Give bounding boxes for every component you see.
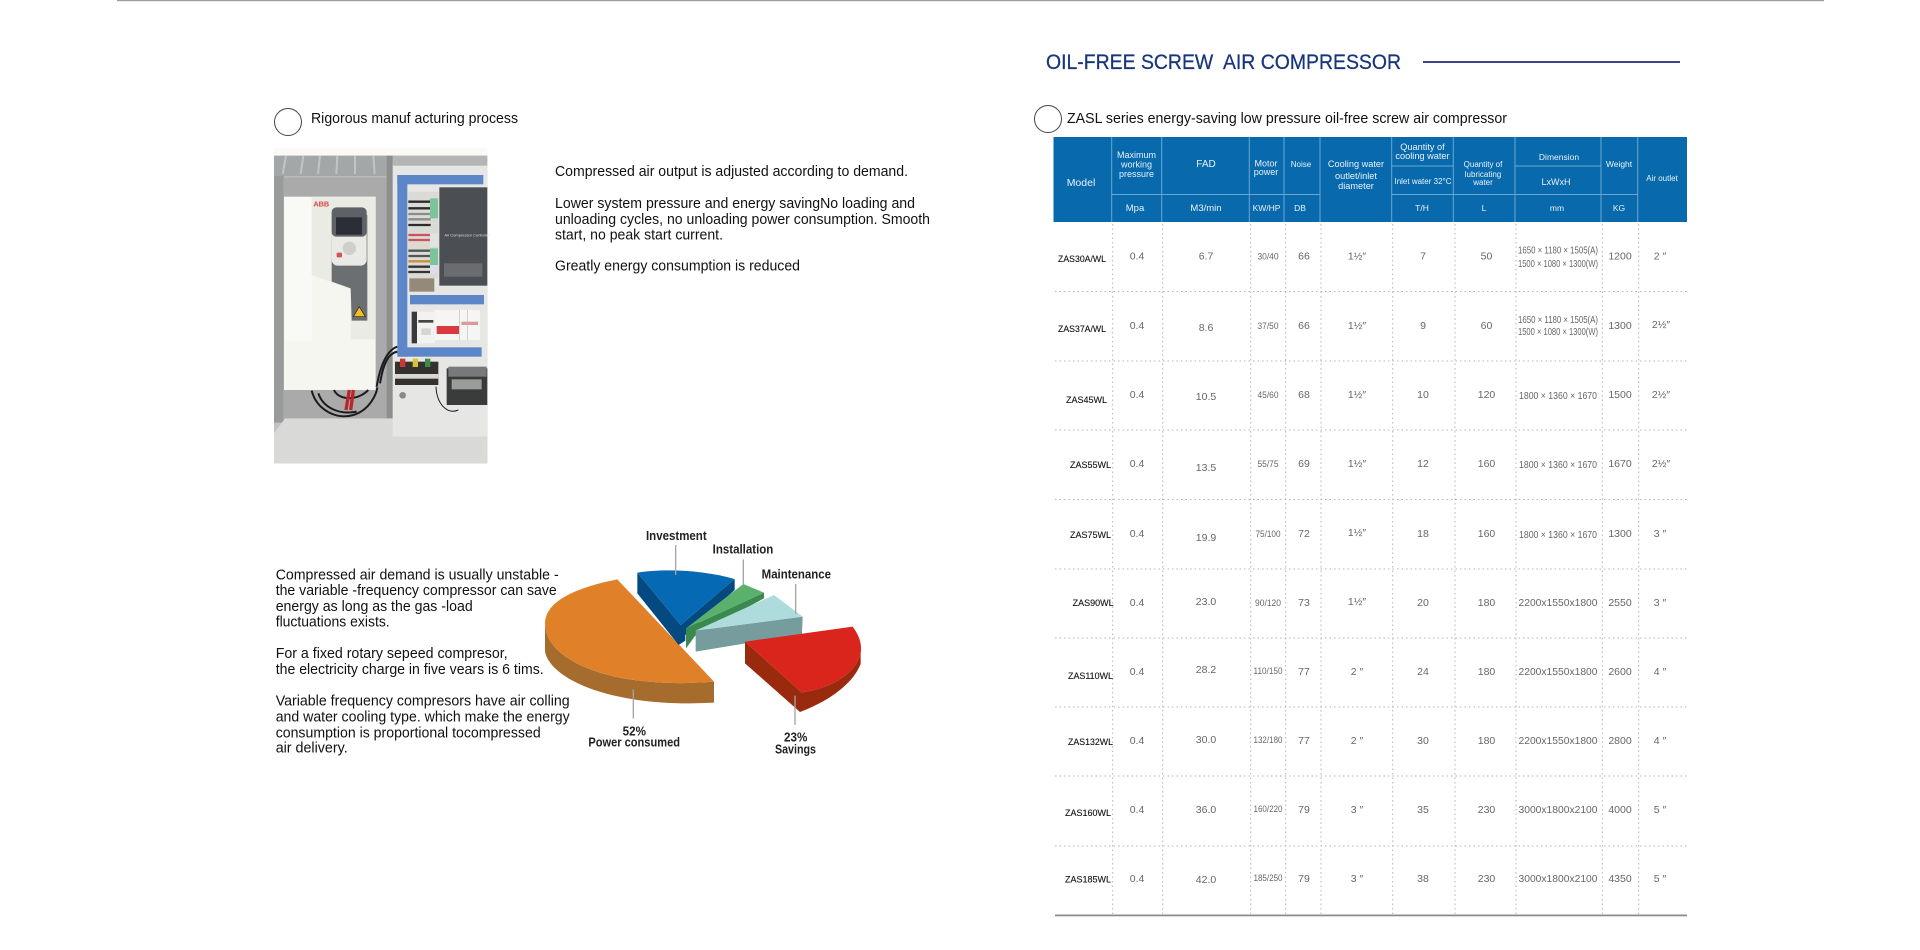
row: ZAS110WL: 2600 xyxy=(1608,666,1632,678)
table header: cooling water xyxy=(1395,151,1450,161)
slice: power consumed xyxy=(545,579,714,703)
row: ZAS160WL: 35 xyxy=(1417,804,1429,816)
text block: variable frequency explanation: For a fixed rotary sepeed compresor, xyxy=(276,645,508,662)
text block: variable frequency explanation xyxy=(276,566,570,757)
row: ZAS185WL xyxy=(1065,873,1667,886)
row: ZAS75WL: ZAS75WL xyxy=(1070,530,1111,541)
row: ZAS75WL: 75/100 xyxy=(1256,529,1280,540)
row: ZAS30A/WL: 30/40 xyxy=(1258,252,1278,262)
blue brackets xyxy=(397,175,484,357)
panel: manufacturing process xyxy=(274,108,930,463)
table header: Motor xyxy=(1254,159,1278,169)
row: ZAS55WL: 1½″ xyxy=(1348,458,1366,470)
row: ZAS30A/WL: ZAS30A/WL xyxy=(1058,254,1106,265)
text block: demand adjustment: Greatly energy consumption is reduced xyxy=(555,258,800,275)
table header: mm xyxy=(1550,203,1564,213)
row: ZAS132WL: 4 ″ xyxy=(1654,735,1667,747)
row: ZAS185WL: 38 xyxy=(1417,873,1429,885)
heading: rigorous manufacturing process: Rigorous manuf acturing process xyxy=(311,110,518,127)
row: ZAS30A/WL: 2 ″ xyxy=(1654,250,1667,262)
row: ZAS132WL: 2 ″ xyxy=(1351,735,1364,747)
row: ZAS55WL: 2½″ xyxy=(1652,458,1670,470)
text block: demand adjustment: Lower system pressure and energy savingNo loading and xyxy=(555,195,915,212)
row: ZAS55WL: 1800 × 1360 × 1670 xyxy=(1519,459,1597,471)
row: ZAS55WL: 55/75 xyxy=(1258,459,1278,470)
row: ZAS160WL: 230 xyxy=(1478,804,1495,816)
row: ZAS55WL: 0.4 xyxy=(1130,458,1144,470)
table header: Dimension xyxy=(1539,152,1579,162)
text block: demand adjustment: start, no peak start current. xyxy=(555,226,723,244)
row: ZAS45WL: 1½″ xyxy=(1348,389,1366,401)
row: ZAS90WL: 2550 xyxy=(1608,597,1632,609)
row: ZAS30A/WL: 1500 × 1080 × 1300(W) xyxy=(1518,258,1598,270)
row: ZAS45WL: 120 xyxy=(1478,389,1495,401)
row: ZAS30A/WL: 1200 xyxy=(1608,250,1632,262)
row: ZAS110WL: 24 xyxy=(1417,666,1429,678)
pie labels xyxy=(588,529,831,756)
row: ZAS37A/WL: 1500 × 1080 × 1300(W) xyxy=(1518,326,1598,338)
table header: KG xyxy=(1613,203,1625,213)
table header: pressure xyxy=(1119,169,1154,179)
row: ZAS185WL: 79 xyxy=(1298,873,1310,885)
table header: diameter xyxy=(1338,181,1374,191)
row: ZAS37A/WL: 0.4 xyxy=(1130,320,1144,332)
row: ZAS160WL: ZAS160WL xyxy=(1065,808,1111,819)
table: specifications xyxy=(1054,137,1688,916)
row: ZAS30A/WL: 1½″ xyxy=(1348,250,1366,262)
row: ZAS110WL: 4 ″ xyxy=(1654,666,1667,678)
row: ZAS90WL: 0.4 xyxy=(1130,597,1144,609)
row: ZAS132WL: 30 xyxy=(1417,735,1429,747)
row: ZAS90WL: 90/120 xyxy=(1255,598,1281,609)
table header: Maximum xyxy=(1117,150,1156,160)
slice: installation xyxy=(686,584,764,648)
row: ZAS37A/WL: 1650 × 1180 × 1505(A) xyxy=(1518,314,1598,326)
row: ZAS37A/WL: 37/50 xyxy=(1258,321,1278,332)
row: ZAS45WL: 10.5 xyxy=(1196,391,1216,403)
row: ZAS75WL: 1½″ xyxy=(1348,527,1366,539)
row: ZAS90WL: 1½″ xyxy=(1348,596,1366,608)
table header: FAD xyxy=(1196,159,1216,170)
row: ZAS37A/WL: 8.6 xyxy=(1199,322,1213,334)
table header: T/H xyxy=(1415,203,1429,213)
table header: Quantity of xyxy=(1400,142,1445,152)
row: ZAS132WL: 0.4 xyxy=(1130,735,1144,747)
row: ZAS185WL: 3 ″ xyxy=(1351,873,1364,885)
row: ZAS90WL xyxy=(1073,596,1667,609)
pie labels: 23% xyxy=(784,731,807,745)
row: ZAS132WL xyxy=(1068,734,1667,748)
row: ZAS110WL: 0.4 xyxy=(1130,666,1144,678)
table header: Mpa xyxy=(1126,203,1145,214)
text block: demand adjustment xyxy=(555,163,930,275)
row: ZAS132WL: 2200x1550x1800 xyxy=(1518,735,1598,747)
table header: KW/HP xyxy=(1253,203,1281,213)
row: ZAS132WL: 2800 xyxy=(1608,735,1632,747)
row: ZAS30A/WL: 0.4 xyxy=(1130,250,1144,262)
row: ZAS30A/WL: 6.7 xyxy=(1199,250,1213,262)
text block: variable frequency explanation: air delivery. xyxy=(276,740,348,757)
row: ZAS90WL: 73 xyxy=(1298,597,1310,609)
pie labels: Power consumed xyxy=(588,735,680,749)
row: ZAS132WL: 77 xyxy=(1298,735,1310,747)
pie labels: Maintenance xyxy=(762,567,831,581)
leader lines xyxy=(633,545,796,725)
row: ZAS55WL: 1670 xyxy=(1608,458,1632,470)
row: ZAS110WL: 2200x1550x1800 xyxy=(1518,666,1598,678)
row: ZAS160WL: 36.0 xyxy=(1196,804,1216,816)
row: ZAS37A/WL: 1½″ xyxy=(1348,320,1366,332)
row: ZAS90WL: 3 ″ xyxy=(1654,597,1667,609)
row: ZAS30A/WL: 7 xyxy=(1420,250,1426,262)
row: ZAS45WL: 68 xyxy=(1298,389,1310,401)
row: ZAS185WL: 4350 xyxy=(1608,873,1632,885)
row: ZAS110WL: 2 ″ xyxy=(1351,666,1364,678)
row: ZAS75WL: 19.9 xyxy=(1196,532,1216,544)
row: ZAS185WL: 185/250 xyxy=(1254,873,1282,884)
table header: outlet/inlet xyxy=(1335,171,1377,181)
row: ZAS45WL: 1500 xyxy=(1608,389,1632,401)
row: ZAS45WL: 1800 × 1360 × 1670 xyxy=(1519,390,1597,402)
photo: control cabinet xyxy=(274,148,491,463)
row: ZAS160WL: 5 ″ xyxy=(1654,804,1667,816)
row: ZAS30A/WL: 1650 × 1180 × 1505(A) xyxy=(1518,244,1598,256)
row: ZAS185WL: 3000x1800x2100 xyxy=(1518,873,1598,885)
pie labels: Investment xyxy=(646,529,707,543)
row: ZAS45WL: 2½″ xyxy=(1652,389,1670,401)
row: ZAS185WL: 5 ″ xyxy=(1654,873,1667,885)
row: ZAS75WL: 3 ″ xyxy=(1654,528,1667,540)
cables xyxy=(312,347,458,416)
text block: demand adjustment: unloading cycles, no unloading power consumption. Smooth xyxy=(555,211,930,228)
row: ZAS45WL xyxy=(1066,389,1670,406)
pie labels: Installation xyxy=(713,543,773,557)
text block: variable frequency explanation: consumption is proportional tocompressed xyxy=(276,724,541,741)
row: ZAS110WL: 180 xyxy=(1478,666,1495,678)
row: ZAS160WL: 0.4 xyxy=(1130,804,1144,816)
heading: rigorous manufacturing process xyxy=(274,108,518,136)
row: ZAS160WL: 160/220 xyxy=(1254,804,1282,815)
row: ZAS185WL: ZAS185WL xyxy=(1065,874,1111,886)
row: ZAS45WL: 0.4 xyxy=(1130,389,1144,401)
breakers xyxy=(412,310,480,343)
row: ZAS75WL: 1300 xyxy=(1608,528,1632,540)
row: ZAS75WL: 160 xyxy=(1478,528,1495,540)
row: ZAS37A/WL: 60 xyxy=(1481,320,1492,332)
slice: maintenance xyxy=(696,595,803,652)
slice: investment xyxy=(637,570,735,645)
row: ZAS160WL xyxy=(1065,804,1667,819)
row: ZAS132WL: 132/180 xyxy=(1254,735,1282,746)
row: ZAS185WL: 0.4 xyxy=(1130,873,1144,885)
controller: Air Compressor Controller xyxy=(444,233,491,238)
table header: Noise xyxy=(1291,160,1312,169)
row: ZAS132WL: 30.0 xyxy=(1196,734,1216,746)
table header: Air outlet xyxy=(1646,174,1679,183)
row: ZAS185WL: 42.0 xyxy=(1196,874,1216,886)
row: ZAS55WL xyxy=(1070,458,1670,474)
text block: variable frequency explanation: Variable frequency compresors have air colling xyxy=(276,693,570,710)
row: ZAS55WL: 13.5 xyxy=(1196,462,1216,474)
row: ZAS132WL: 180 xyxy=(1478,735,1495,747)
row: ZAS75WL: 0.4 xyxy=(1130,528,1144,540)
pie labels: 52% xyxy=(623,725,646,739)
table header: working xyxy=(1120,160,1152,170)
slice: savings xyxy=(745,627,861,712)
controller xyxy=(439,187,491,286)
table header: M3/min xyxy=(1190,203,1222,214)
row: ZAS160WL: 3000x1800x2100 xyxy=(1518,804,1598,816)
row: ZAS110WL: 110/150 xyxy=(1254,666,1282,677)
terminals xyxy=(395,359,487,405)
pie labels: Savings xyxy=(775,742,816,756)
row: ZAS90WL: ZAS90WL xyxy=(1073,598,1114,609)
heading: ZASL series: ZASL series energy-saving low pressure oil-free screw air compressor xyxy=(1067,110,1507,127)
row: ZAS45WL: 45/60 xyxy=(1258,390,1278,401)
row: ZAS132WL: ZAS132WL xyxy=(1068,737,1113,748)
row: ZAS30A/WL: 66 xyxy=(1298,250,1310,262)
text block: variable frequency explanation: the electricity charge in five vears is 6 tims. xyxy=(276,661,544,678)
table header: DB xyxy=(1294,203,1306,213)
table header xyxy=(1054,137,1687,222)
table header: Weight xyxy=(1606,159,1633,169)
text block: variable frequency explanation: fluctuations exists. xyxy=(276,614,390,631)
table header: L xyxy=(1482,203,1487,213)
row: ZAS110WL: ZAS110WL xyxy=(1068,671,1113,682)
table header: Quantity of xyxy=(1464,160,1503,169)
row: ZAS90WL: 2200x1550x1800 xyxy=(1518,597,1598,609)
row: ZAS160WL: 3 ″ xyxy=(1351,804,1364,816)
row: ZAS110WL: 28.2 xyxy=(1196,664,1216,676)
row: ZAS37A/WL: ZAS37A/WL xyxy=(1058,324,1106,335)
row: ZAS55WL: 160 xyxy=(1478,458,1495,470)
table header: power xyxy=(1254,167,1278,177)
heading: ZASL series xyxy=(1034,106,1507,132)
row: ZAS75WL xyxy=(1070,527,1667,544)
text block: variable frequency explanation: and water cooling type. which make the energy xyxy=(276,708,570,725)
row: ZAS90WL: 20 xyxy=(1417,597,1429,609)
text block: variable frequency explanation: the variable -frequency compressor can save xyxy=(276,582,557,599)
text block: variable frequency explanation: Compressed air demand is usually unstable - xyxy=(276,566,559,583)
row: ZAS30A/WL xyxy=(1058,244,1667,270)
row: ZAS45WL: ZAS45WL xyxy=(1066,395,1107,406)
table header: LxWxH xyxy=(1542,177,1570,187)
ABB drive xyxy=(284,197,376,390)
row: ZAS55WL: 69 xyxy=(1298,458,1310,470)
row: ZAS160WL: 79 xyxy=(1298,804,1310,816)
table header: water xyxy=(1472,178,1493,187)
wiring xyxy=(408,192,438,278)
row: ZAS37A/WL: 9 xyxy=(1420,320,1426,332)
title: OIL-FREE SCREW AIR COMPRESSOR xyxy=(1046,50,1401,74)
row: ZAS75WL: 1800 × 1360 × 1670 xyxy=(1519,529,1597,541)
row: ZAS37A/WL xyxy=(1058,314,1670,338)
text block: variable frequency explanation: energy as long as the gas -load xyxy=(276,598,473,615)
row: ZAS55WL: 12 xyxy=(1417,458,1429,470)
row: ZAS75WL: 72 xyxy=(1298,528,1310,540)
row: ZAS55WL: ZAS55WL xyxy=(1070,460,1111,471)
row: ZAS37A/WL: 66 xyxy=(1298,320,1310,332)
row: ZAS110WL: 77 xyxy=(1298,666,1310,678)
row: ZAS185WL: 230 xyxy=(1478,873,1495,885)
table header: lubricating xyxy=(1465,170,1501,179)
row: ZAS30A/WL: 50 xyxy=(1481,250,1492,262)
text block: demand adjustment: Compressed air output is adjusted according to demand. xyxy=(555,163,908,180)
row: ZAS160WL: 4000 xyxy=(1608,804,1632,816)
row: ZAS75WL: 18 xyxy=(1417,528,1429,540)
row: ZAS37A/WL: 1300 xyxy=(1608,320,1632,332)
chart: exploded 3D pie xyxy=(545,529,861,756)
row: ZAS37A/WL: 2½″ xyxy=(1652,319,1670,331)
table header: Model xyxy=(1067,177,1095,189)
ABB drive: ABB xyxy=(313,200,329,209)
row: ZAS45WL: 10 xyxy=(1417,389,1429,401)
table header: Cooling water xyxy=(1328,159,1384,169)
table header: Inlet water 32°C xyxy=(1394,177,1452,186)
row: ZAS110WL xyxy=(1068,664,1667,682)
row: ZAS90WL: 23.0 xyxy=(1196,596,1216,608)
row: ZAS90WL: 180 xyxy=(1478,597,1495,609)
